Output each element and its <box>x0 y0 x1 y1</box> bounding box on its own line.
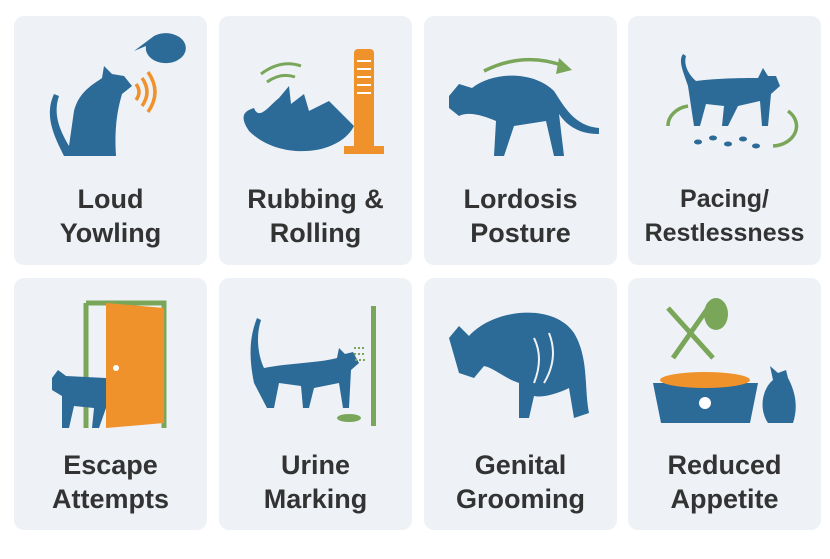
icon: walking cat <box>666 54 798 148</box>
icon: marking cat <box>250 306 376 426</box>
label <box>247 184 384 248</box>
label: Grooming <box>456 484 585 514</box>
label: Genital <box>475 450 566 480</box>
card: genital grooming <box>424 278 617 530</box>
card: reduced appetite <box>628 278 821 530</box>
card: pacing <box>628 16 821 265</box>
label: Escape <box>63 450 158 480</box>
label <box>60 184 161 248</box>
icon: grooming cat <box>449 312 589 418</box>
label: Lordosis <box>463 184 578 214</box>
label: Rolling <box>270 218 361 248</box>
card: escape <box>14 278 207 530</box>
label: Appetite <box>670 484 778 514</box>
label: Loud <box>78 184 143 214</box>
label: Urine <box>281 450 350 480</box>
card: loud yowling <box>14 16 207 265</box>
label: Posture <box>470 218 571 248</box>
icon: arched cat <box>449 58 599 156</box>
label: Marking <box>264 484 367 514</box>
card: lordosis posture <box>424 16 617 265</box>
icon: yowling cat <box>50 33 186 156</box>
label: Restlessness <box>645 219 804 247</box>
card: urine marking <box>219 278 412 530</box>
label: Attempts <box>52 484 169 514</box>
label: Reduced <box>667 450 782 480</box>
label: Yowling <box>60 218 161 248</box>
label <box>456 450 585 514</box>
label: Pacing/ <box>680 185 769 213</box>
icon: rolling cat and post <box>244 49 384 154</box>
label <box>645 185 804 247</box>
label <box>264 450 367 514</box>
label <box>667 450 782 514</box>
label: Rubbing & <box>247 184 384 214</box>
label <box>52 450 169 514</box>
label <box>463 184 578 248</box>
card: rubbing & rolling <box>219 16 412 265</box>
icon: bowl and utensils <box>653 298 796 423</box>
icon: cat at door <box>52 300 166 428</box>
